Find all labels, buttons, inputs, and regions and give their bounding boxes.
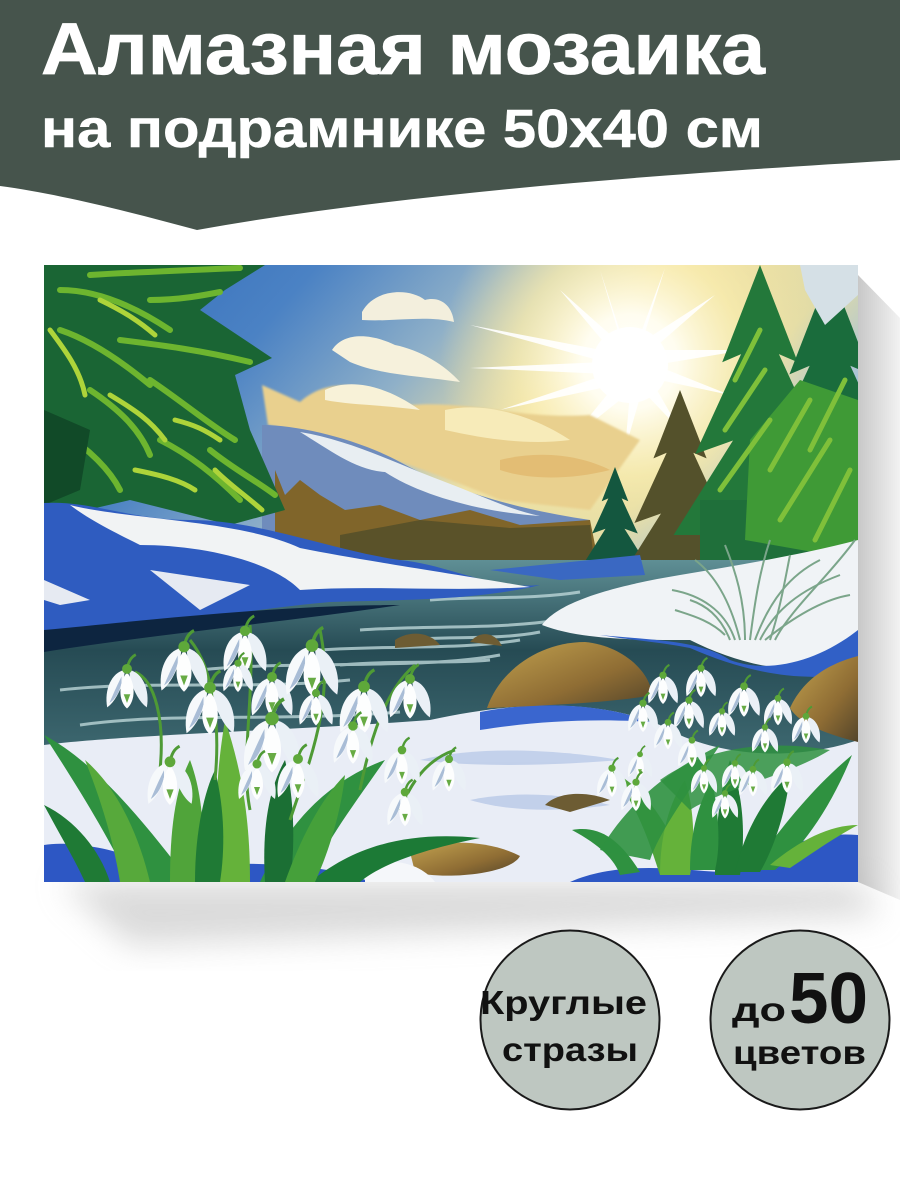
blue snow at bottom xyxy=(44,834,858,882)
left pine tree xyxy=(44,265,285,525)
badge: up to 50 colours xyxy=(710,930,890,1110)
badge: round rhinestones: Круглые xyxy=(480,984,647,1021)
subtitle: на подрамнике 50х40 см xyxy=(41,99,763,159)
right snowdrop leaves xyxy=(572,745,858,875)
right trees xyxy=(586,265,858,560)
badge: up to 50 colours: цветов xyxy=(733,1034,866,1071)
left snowdrop stems xyxy=(135,625,455,820)
badge: round rhinestones xyxy=(480,930,660,1110)
sun glow xyxy=(450,265,801,528)
left snowbank xyxy=(44,503,540,652)
reeds xyxy=(672,540,855,640)
foreground snow xyxy=(44,706,858,882)
rocks xyxy=(395,634,858,876)
painting: winter landscape with snowdrops xyxy=(44,265,858,882)
river xyxy=(44,560,858,760)
left snowdrop leaves xyxy=(44,720,480,882)
badge: round rhinestones: стразы xyxy=(502,1031,638,1068)
sky xyxy=(97,265,858,550)
right snowbank xyxy=(490,540,858,677)
badge: up to 50 colours: до xyxy=(732,991,786,1028)
canvas drop shadow xyxy=(60,275,900,945)
left snowdrop flowers xyxy=(106,616,466,826)
far forest xyxy=(275,470,595,550)
mountains xyxy=(262,425,590,532)
badge: up to 50 colours: 50 xyxy=(789,959,868,1039)
header banner xyxy=(0,0,900,230)
title: Алмазная мозаика xyxy=(41,9,767,90)
right snowdrop flowers xyxy=(597,658,820,818)
clouds xyxy=(262,292,640,510)
